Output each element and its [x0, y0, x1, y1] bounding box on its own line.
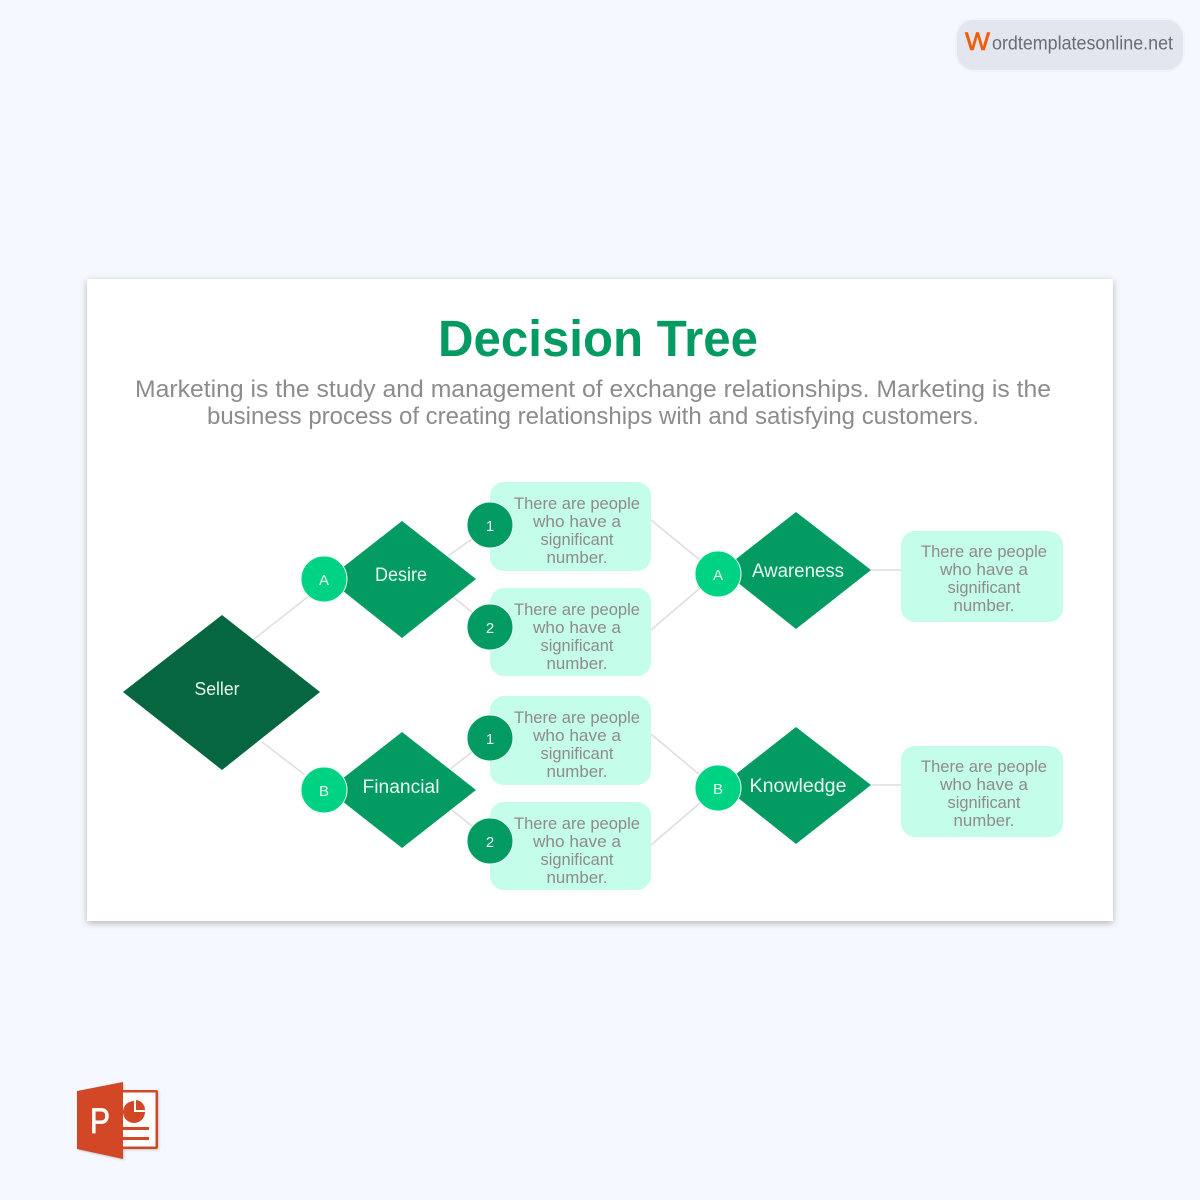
text box: Awareness: significant [948, 578, 1021, 597]
badge: 1 for Financial [467, 715, 513, 761]
diamond: Seller: Seller [194, 679, 240, 699]
text box: Awareness: There are people [921, 542, 1047, 561]
text box: Desire option 2: number. [546, 654, 608, 673]
slide panel [87, 279, 1113, 921]
diamond: Seller [123, 615, 320, 770]
badge: 2 for Desire [467, 604, 513, 650]
badge: 1 for Desire [467, 502, 513, 548]
text box: Awareness: number. [954, 596, 1014, 615]
text box: Financial option 1: who have a [532, 726, 622, 745]
logo badge: wordtemplatesonline.net: W [965, 28, 990, 56]
text box: Financial option 1: significant [540, 744, 614, 763]
text box: Awareness [901, 531, 1063, 622]
connector lines [253, 520, 901, 845]
text box: Financial option 2: significant [540, 850, 614, 869]
diamond: Financial [328, 732, 476, 848]
subtitle text [135, 376, 1051, 430]
text box: Desire option 1: number. [546, 548, 608, 567]
text box: Financial option 1: number. [546, 762, 608, 781]
badge: 2 for Financial: 2 [486, 834, 494, 851]
icon: PowerPoint logo: P [90, 1102, 110, 1141]
text box: Awareness: who have a [939, 560, 1029, 579]
text box: Desire option 2: who have a [532, 618, 622, 637]
diamond: Knowledge [722, 727, 871, 844]
badge: 2 for Financial [467, 818, 513, 864]
diamond: Financial: Financial [362, 777, 440, 798]
diamond: Awareness [722, 512, 871, 629]
text box: Desire option 1: significant [540, 530, 614, 549]
badge: 1 for Desire: 1 [486, 518, 494, 535]
badge: B for Financial: B [319, 783, 329, 800]
badge: B for Knowledge: B [713, 781, 723, 798]
badge: B for Knowledge [695, 765, 741, 811]
icon: PowerPoint logo [77, 1082, 158, 1159]
text box: Desire option 1: who have a [532, 512, 622, 531]
badge: A for Desire: A [319, 572, 329, 589]
badge: 2 for Desire: 2 [486, 620, 494, 637]
text box: Financial option 2: who have a [532, 832, 622, 851]
text box: Knowledge [901, 746, 1063, 837]
text box: Financial option 1 [490, 696, 651, 785]
text box: Knowledge: There are people [921, 757, 1047, 776]
badge: A for Awareness [695, 551, 741, 597]
text box: Desire option 2: There are people [514, 600, 640, 619]
badge: B for Financial [301, 767, 347, 813]
logo badge: wordtemplatesonline.net [956, 19, 1184, 71]
text box: Desire option 1 [490, 482, 651, 571]
text box: Financial option 2: number. [546, 868, 608, 887]
diamond: Knowledge: Knowledge [750, 776, 846, 797]
text box: Desire option 2 [490, 588, 651, 676]
logo badge: wordtemplatesonline.net: ordtemplatesonline.net [992, 34, 1174, 54]
text box: Financial option 1: There are people [514, 708, 640, 727]
badge: A for Desire [301, 556, 347, 602]
badge: 1 for Financial: 1 [486, 731, 494, 748]
diamond: Desire: Desire [375, 565, 427, 586]
diamond: Desire [328, 521, 476, 638]
subtitle text: business process of creating relationships with and satisfying customers. [207, 403, 979, 430]
text box: Knowledge: number. [954, 811, 1014, 830]
text box: Knowledge: who have a [939, 775, 1029, 794]
text box: Financial option 2: There are people [514, 814, 640, 833]
text box: Desire option 2: significant [540, 636, 614, 655]
text box: Desire option 1: There are people [514, 494, 640, 513]
title: Decision Tree [438, 310, 758, 367]
diamond: Awareness: Awareness [752, 561, 844, 582]
text box: Knowledge: significant [948, 793, 1021, 812]
subtitle text: Marketing is the study and management of exchange relationships. Marketing is the [135, 376, 1051, 403]
text box: Financial option 2 [490, 802, 651, 890]
badge: A for Awareness: A [713, 567, 723, 584]
